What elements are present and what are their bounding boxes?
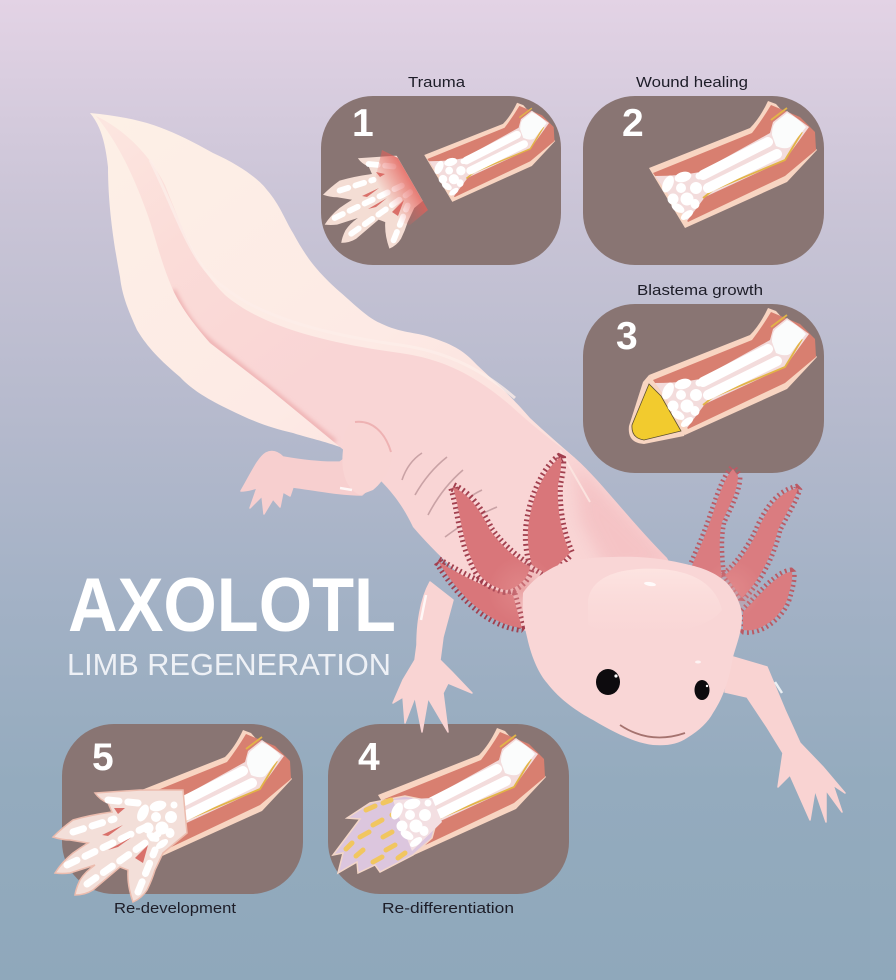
- head: [523, 557, 742, 745]
- panel background 2: [583, 96, 824, 265]
- right eye: [694, 680, 710, 700]
- gill right 2: [725, 488, 798, 598]
- step number 3: 3: [616, 315, 638, 358]
- arm with forming hand: [333, 728, 546, 873]
- heading: Wound healing: Wound healing: [636, 74, 748, 91]
- brow glint: [644, 581, 656, 587]
- step number 4: 4: [358, 736, 380, 779]
- severed hand: [323, 150, 434, 249]
- tail underside shadow: [173, 290, 335, 442]
- gill base blush left: [488, 556, 556, 624]
- front left limb: [393, 582, 472, 732]
- severed arm: [424, 103, 555, 202]
- arm with regrown hand: [53, 730, 292, 902]
- front right limb: [725, 657, 845, 822]
- hind limb: [241, 440, 390, 514]
- panel background 4: [328, 724, 569, 894]
- arm with blastema: [629, 308, 817, 444]
- hip: [342, 420, 392, 495]
- limb glints: [340, 488, 782, 693]
- axolotl illustration: [90, 113, 845, 822]
- panel 1: trauma: [321, 74, 561, 265]
- gill left 2: [453, 487, 530, 590]
- heading: Blastema growth: Blastema growth: [637, 282, 763, 299]
- tail fin: [90, 113, 575, 480]
- gill right 3: [743, 572, 792, 630]
- gill base blush right: [702, 560, 762, 620]
- gill left 3: [528, 457, 570, 575]
- body: [96, 116, 690, 640]
- panel 2: wound healing: [583, 74, 824, 265]
- panel 4: re-differentiation: [328, 724, 569, 917]
- panel 3: blastema growth: [583, 282, 824, 473]
- step number 1: 1: [352, 102, 374, 145]
- panel background 5: [62, 724, 303, 894]
- title: AXOLOTL: [68, 563, 396, 648]
- head highlight: [588, 569, 722, 635]
- heading: Trauma: Trauma: [408, 74, 466, 91]
- panel background 1: [321, 96, 561, 265]
- panel 5: re-development: [53, 724, 303, 917]
- heading: Re-development: Re-development: [114, 900, 237, 917]
- step number 5: 5: [92, 736, 114, 779]
- panel background 3: [583, 304, 824, 473]
- heading: Re-differentiation: Re-differentiation: [382, 900, 514, 917]
- mouth: [620, 725, 685, 738]
- step number 2: 2: [622, 102, 644, 145]
- gill right 1: [692, 469, 738, 578]
- healed arm: [649, 101, 817, 228]
- ribs: [402, 453, 497, 537]
- forehead glint: [695, 660, 701, 664]
- neck shade: [576, 476, 668, 560]
- hip crease: [355, 422, 391, 452]
- dorsal stripe: [560, 450, 590, 502]
- subtitle: LIMB REGENERATION: [67, 647, 391, 682]
- dorsal light band: [150, 160, 515, 398]
- left eye: [596, 669, 620, 695]
- gill left 1: [438, 561, 522, 628]
